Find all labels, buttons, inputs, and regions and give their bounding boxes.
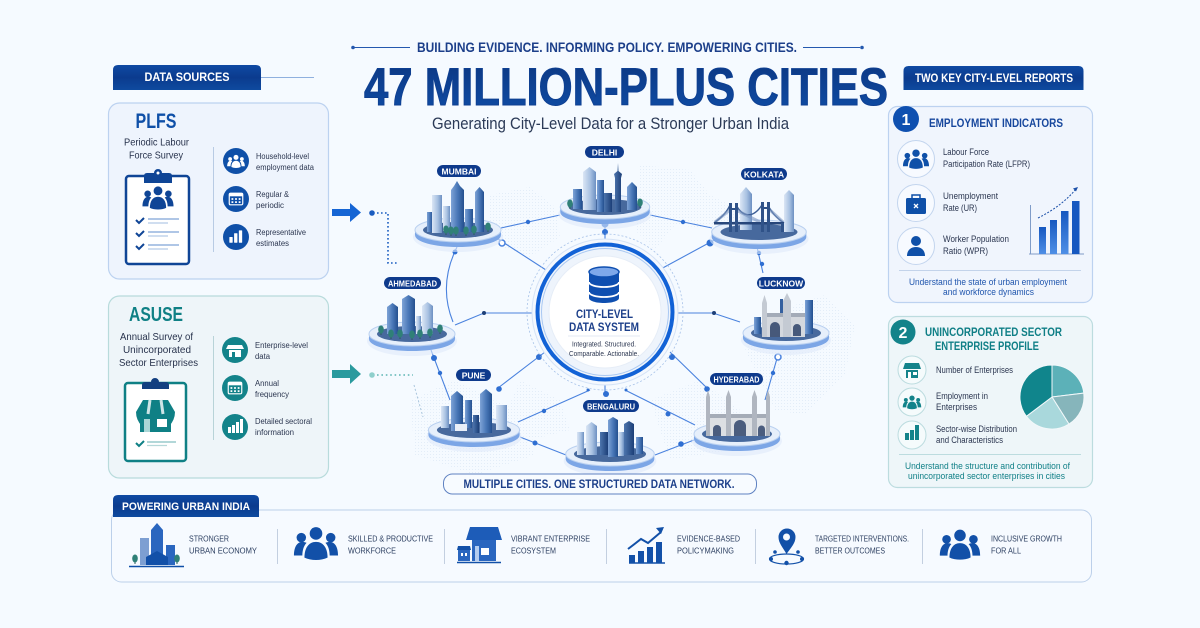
benefit: economy: STRONGER: [189, 534, 229, 544]
heading: powering urban india: POWERING URBAN INDIA: [122, 501, 250, 513]
city: Delhi: DELHI: [592, 148, 617, 158]
city: Bengaluru: BENGALURU: [587, 402, 635, 412]
profile: enterprises: [898, 356, 1014, 384]
badge 1: [893, 106, 919, 132]
ASUSE feature: enterprise-level: Enterprise-level: [255, 341, 308, 350]
bar chart: [1029, 187, 1084, 254]
profile: enterprises: Number of Enterprises: [936, 365, 1014, 375]
benefit: interventions: TARGETED INTERVENTIONS.: [815, 534, 909, 544]
PLFS feature: household-level: employment data: [256, 163, 315, 172]
benefit: interventions: BETTER OUTCOMES: [815, 546, 885, 556]
PLFS feature: estimates: Representative: [256, 228, 307, 237]
ASUSE title: ASUSE: [129, 304, 183, 326]
heading: data sources: [113, 65, 314, 90]
profile: employment: [898, 388, 988, 416]
panel heading: UNINCORPORATED SECTOR: [925, 325, 1062, 339]
benefit: economy: URBAN ECONOMY: [189, 546, 258, 556]
city: Hyderabad: [692, 373, 782, 456]
indicator: LFPR: Labour Force: [943, 147, 989, 157]
indicator: WPR: Worker Population: [943, 234, 1009, 244]
panel: enterprise profile: [888, 316, 1092, 488]
panel: PLFS: [108, 103, 328, 279]
indicator: UR: [898, 184, 999, 222]
panel: ASUSE: [108, 296, 328, 478]
pie chart: [1020, 365, 1084, 429]
indicator: LFPR: Participation Rate (LFPR): [943, 159, 1030, 169]
ASUSE feature: sectoral: Detailed sectoral: [255, 417, 312, 426]
city: Kolkata: [710, 168, 808, 254]
indicator: UR: Rate (UR): [943, 203, 977, 213]
city: Kolkata: KOLKATA: [744, 170, 784, 180]
callout: multiple cities: [444, 474, 756, 494]
panel insight: Understand the structure and contribution of: [905, 461, 1071, 471]
ASUSE feature: annual: frequency: [255, 390, 289, 399]
benefit: enterprise: VIBRANT ENTERPRISE: [511, 534, 590, 544]
city: Pune: [426, 369, 522, 452]
city: Mumbai: MUMBAI: [442, 166, 476, 176]
indicator: WPR: [898, 228, 1009, 264]
PLFS full name: Force Survey: [129, 150, 184, 162]
indicator: LFPR: [898, 140, 1030, 178]
ASUSE feature: annual: [222, 375, 289, 401]
arrow: PLFS to network: [332, 203, 399, 263]
city: Delhi: [558, 146, 652, 229]
benefit: policymaking: EVIDENCE-BASED: [677, 534, 740, 544]
city: Ahmedabad: [367, 277, 457, 356]
profile: sector-wise: and Characteristics: [936, 435, 1004, 445]
benefit: workforce: [294, 527, 433, 560]
PLFS title: PLFS: [136, 110, 176, 133]
hub caption: Comparable. Actionable.: [569, 349, 639, 358]
indicator: WPR: Ratio (WPR): [943, 246, 988, 256]
network connections: [431, 215, 781, 455]
background dotted map: [410, 165, 855, 475]
ASUSE full name: Unincorporated: [123, 344, 191, 356]
city: Ahmedabad: AHMEDABAD: [388, 278, 437, 288]
city: Hyderabad: HYDERABAD: [714, 374, 760, 384]
icon: PLFS clipboard: [126, 169, 189, 264]
benefit: inclusive growth: INCLUSIVE GROWTH: [991, 534, 1062, 544]
icon: database: [589, 267, 619, 303]
hub label: CITY-LEVEL: [576, 309, 633, 321]
PLFS full name: Periodic Labour: [124, 136, 189, 148]
profile: employment: Employment in: [936, 391, 988, 401]
heading: reports: TWO KEY CITY-LEVEL REPORTS: [915, 73, 1073, 85]
panel: powering urban india: [112, 495, 1092, 582]
callout: multiple cities: MULTIPLE CITIES. ONE STRUCTURED DATA NETWORK.: [464, 477, 734, 491]
heading: reports: [904, 66, 1084, 90]
heading: powering urban india: [113, 495, 259, 517]
panel: employment indicators: [888, 106, 1092, 302]
ASUSE feature: sectoral: [222, 414, 312, 440]
benefit: interventions: [769, 528, 909, 565]
hub: city-level data system: [527, 234, 683, 390]
panel insight: Understand the state of urban employment: [909, 277, 1068, 287]
benefit: enterprise: ECOSYSTEM: [511, 546, 556, 556]
city: Pune: PUNE: [462, 370, 486, 380]
PLFS feature: estimates: [223, 224, 307, 250]
subtitle: Generating City-Level Data for a Stronger Urban India: [432, 114, 789, 133]
ASUSE full name: Sector Enterprises: [119, 357, 198, 369]
PLFS feature: household-level: [223, 148, 315, 174]
benefit: inclusive growth: FOR ALL: [991, 546, 1021, 556]
benefit: workforce: SKILLED & PRODUCTIVE: [348, 534, 433, 544]
panel insight: unincorporated sector enterprises in cities: [908, 471, 1066, 481]
benefit: enterprise: [457, 527, 590, 562]
badge 1: 1: [902, 112, 911, 129]
benefit: policymaking: POLICYMAKING: [677, 546, 734, 556]
city: Mumbai: [413, 165, 503, 252]
PLFS feature: regular: [223, 186, 290, 212]
PLFS feature: estimates: estimates: [256, 239, 289, 248]
benefit: workforce: WORKFORCE: [348, 546, 396, 556]
ASUSE feature: enterprise-level: data: [255, 352, 271, 361]
panel heading: EMPLOYMENT INDICATORS: [929, 116, 1063, 130]
PLFS feature: regular: Regular &: [256, 190, 290, 199]
city: Bengaluru: [564, 400, 656, 476]
ASUSE feature: enterprise-level: [222, 337, 308, 363]
benefit: economy: [129, 523, 258, 566]
city: Lucknow: LUCKNOW: [759, 278, 804, 288]
ASUSE feature: sectoral: information: [255, 428, 294, 437]
header tagline: BUILDING EVIDENCE. INFORMING POLICY. EMPOWERING CITIES.: [417, 39, 797, 55]
panel heading: ENTERPRISE PROFILE: [935, 339, 1039, 353]
benefit: inclusive growth: [940, 530, 1062, 560]
icon: ASUSE clipboard: [125, 378, 186, 461]
profile: sector-wise: Sector-wise Distribution: [936, 424, 1017, 434]
heading: data sources: DATA SOURCES: [144, 70, 230, 84]
benefit: policymaking: [628, 527, 740, 563]
indicator: UR: Unemployment: [943, 191, 999, 201]
profile: employment: Enterprises: [936, 402, 978, 412]
title: 47 MILLION-PLUS CITIES: [364, 58, 888, 117]
ASUSE feature: annual: Annual: [255, 379, 279, 388]
badge 2: 2: [899, 325, 908, 342]
badge 2: [890, 320, 916, 344]
profile: sector-wise: [898, 421, 1017, 449]
hub caption: Integrated. Structured.: [572, 340, 636, 348]
panel insight: and workforce dynamics: [943, 287, 1035, 297]
arrow: ASUSE to network: [332, 364, 423, 417]
PLFS feature: regular: periodic: [256, 201, 284, 210]
hub label: DATA SYSTEM: [569, 322, 639, 334]
city: Lucknow: [741, 277, 831, 355]
PLFS feature: household-level: Household-level: [256, 152, 309, 161]
ASUSE full name: Annual Survey of: [120, 331, 193, 343]
